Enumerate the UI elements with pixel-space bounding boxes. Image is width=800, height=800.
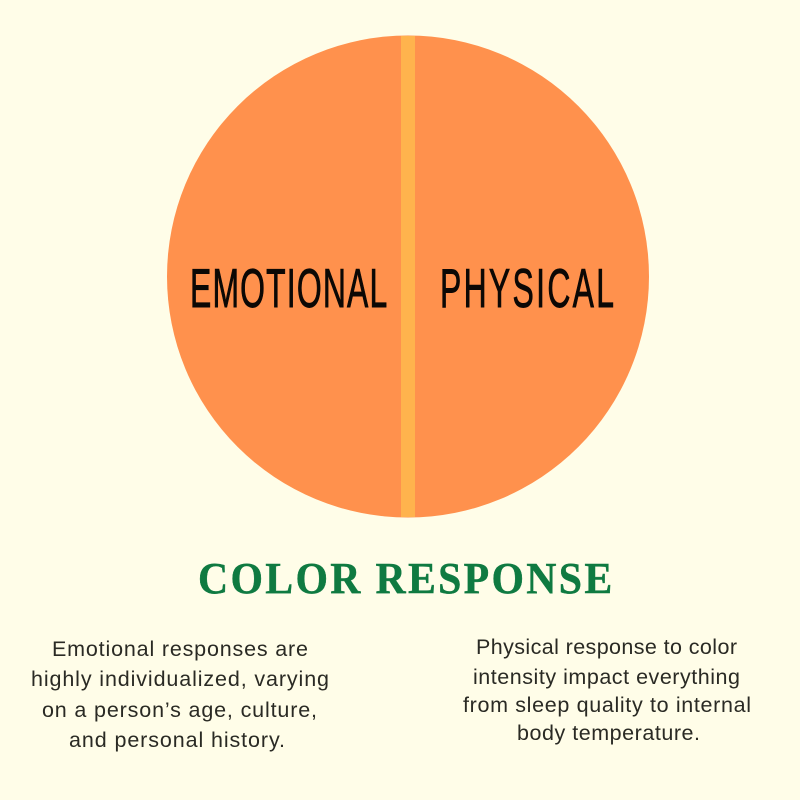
text block: physical description: intensity impact everything: [473, 665, 740, 689]
label: emotional: EMOTIONAL: [190, 257, 387, 319]
heading: color response: COLOR RESPONSE: [198, 555, 612, 603]
text block: emotional description: [31, 637, 329, 752]
text block: emotional description: and personal history.: [69, 728, 285, 752]
center divider bar: [401, 36, 415, 517]
text block: physical description: from sleep quality to internal: [463, 693, 751, 717]
text block: physical description: body temperature.: [517, 721, 700, 745]
text block: physical description: Physical response to color: [476, 635, 737, 659]
text block: emotional description: highly individualized, varying: [31, 667, 329, 691]
text block: physical description: [463, 635, 751, 745]
text block: emotional description: Emotional responses are: [52, 637, 308, 661]
text block: emotional description: on a person’s age, culture,: [42, 698, 317, 722]
circle: [167, 36, 649, 518]
chart: split circle: [167, 36, 649, 518]
label: physical: PHYSICAL: [440, 257, 614, 319]
